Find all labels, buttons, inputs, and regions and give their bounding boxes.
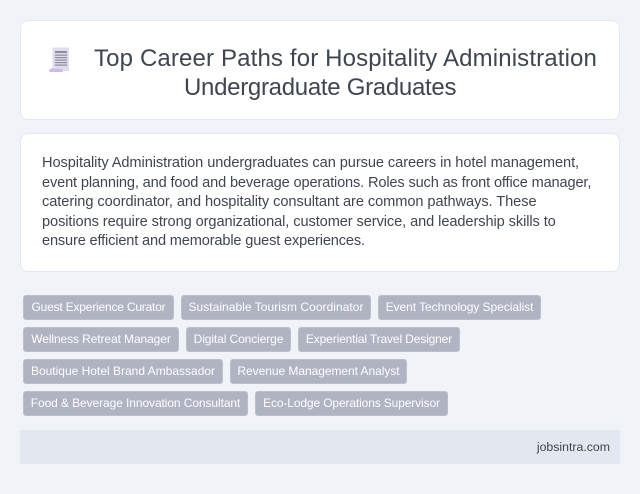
- tag: Eco-Lodge Operations Supervisor: Eco-Lodge Operations Supervisor: [263, 396, 440, 410]
- tag: Digital Concierge: [186, 327, 291, 352]
- tag: Boutique Hotel Brand Ambassador: Boutique Hotel Brand Ambassador: [31, 364, 215, 378]
- tag: Event Technology Specialist: Event Technology Specialist: [386, 300, 533, 314]
- title line 1: Top Career Paths for Hospitality Administration: [94, 45, 597, 72]
- description line 2: event planning, and food and beverage operations. Roles such as front office manager,: [42, 175, 591, 191]
- footer bar: [20, 430, 620, 464]
- tag: Food & Beverage Innovation Consultant: Food & Beverage Innovation Consultant: [31, 396, 240, 410]
- tag: Event Technology Specialist: [378, 295, 541, 320]
- panel: description: [20, 133, 620, 272]
- tag: Revenue Management Analyst: Revenue Management Analyst: [237, 364, 400, 378]
- tag: Sustainable Tourism Coordinator: Sustainable Tourism Coordinator: [188, 300, 364, 314]
- tag: Guest Experience Curator: Guest Experience Curator: [32, 300, 165, 314]
- description line 5: ensure efficient and memorable guest experiences.: [42, 233, 365, 249]
- tag: Guest Experience Curator: [23, 295, 174, 320]
- tag: Digital Concierge: Digital Concierge: [194, 332, 283, 346]
- tag: Experiential Travel Designer: Experiential Travel Designer: [306, 332, 452, 346]
- tag: Wellness Retreat Manager: [23, 327, 179, 352]
- tag: Revenue Management Analyst: [230, 359, 407, 384]
- tag: Wellness Retreat Manager: Wellness Retreat Manager: [31, 332, 171, 346]
- description line 3: catering coordinator, and hospitality consultant are common pathways. These: [42, 194, 536, 210]
- tag: Food & Beverage Innovation Consultant: [23, 391, 248, 416]
- title line 2: Undergraduate Graduates: [184, 74, 456, 101]
- tag: Boutique Hotel Brand Ambassador: [23, 359, 223, 384]
- footer source text: jobsintra.com: [537, 440, 610, 454]
- tag: Eco-Lodge Operations Supervisor: [255, 391, 448, 416]
- tag: Sustainable Tourism Coordinator: [181, 295, 371, 320]
- icon: document scroll: [49, 48, 69, 72]
- panel: header: [20, 20, 620, 120]
- tag: Experiential Travel Designer: [298, 327, 460, 352]
- description line 1: Hospitality Administration undergraduates can pursue careers in hotel management,: [42, 155, 579, 171]
- description line 4: positions require strong organizational, customer service, and leadership skills to: [42, 214, 556, 230]
